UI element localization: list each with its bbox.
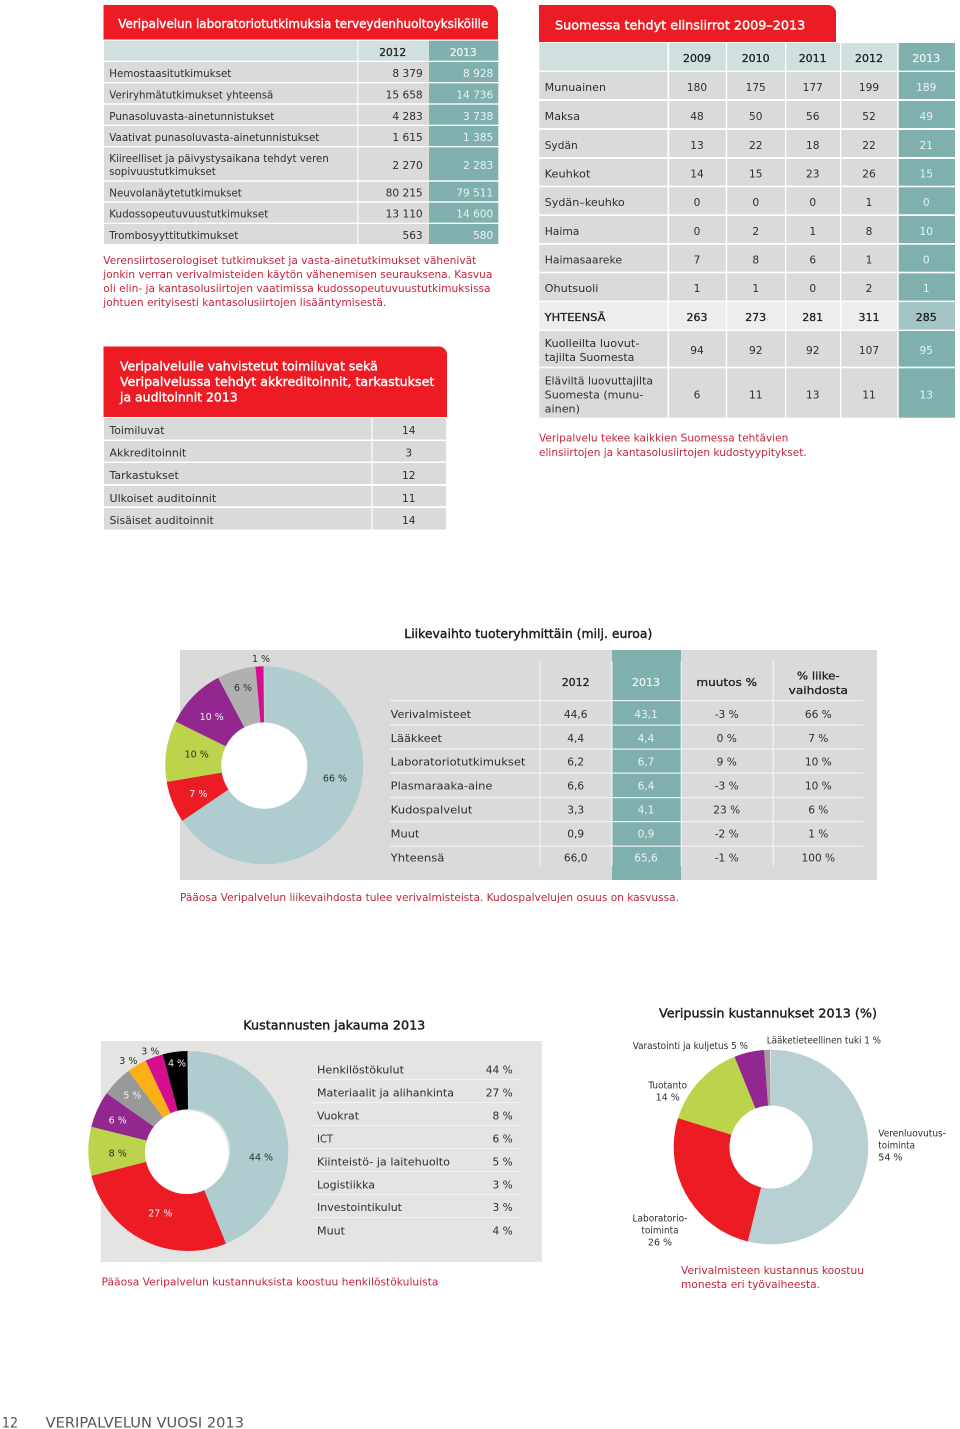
heading: cost distribution: Kustannusten jakauma 2013 <box>243 1018 425 1032</box>
chart labels: blood bag costs: 54 % <box>878 1152 902 1164</box>
row: Eläviltä luovuttajilta: 6 <box>694 389 701 401</box>
row: Maksa <box>539 101 955 128</box>
row: Materiaalit ja alihankinta: Materiaalit ja alihankinta <box>317 1086 454 1099</box>
table header row: 2013 <box>450 47 477 59</box>
row: Hemostaasitutkimukset: Hemostaasitutkimukset <box>109 67 232 80</box>
row: Ohutsuoli: 1 <box>694 283 700 295</box>
row: Haimasaareke: Haimasaareke <box>545 254 622 267</box>
row: Munuainen: Munuainen <box>545 81 606 94</box>
row: Kiireelliset ja päivystysaikana tehdyt: 2 270 <box>392 160 423 172</box>
donut chart: costs: 3 % <box>119 1056 137 1067</box>
row: YHTEENSÄ total: 263 <box>686 311 708 324</box>
row: Ohutsuoli <box>539 273 955 301</box>
row: YHTEENSÄ total: 311 <box>858 311 880 324</box>
panel: laboratory tests table <box>104 5 498 244</box>
text block: serology note: jonkin verran verivalmisteiden käytön vähenemisen seurauksena. Kasvua <box>102 268 492 281</box>
text block: serology note: johtuen erityisesti kantasolusiirtojen lisääntymisestä. <box>102 296 386 309</box>
table header row: 2012 <box>855 52 883 65</box>
table: turnover by product group <box>390 650 863 880</box>
row: Keuhkot: Keuhkot <box>545 168 591 181</box>
row: Logistiikka: Logistiikka <box>317 1178 375 1191</box>
row: Kuolleilta luovuttajilta: 92 <box>749 345 762 357</box>
chart labels: blood bag costs: Varastointi ja kuljetus 5 % <box>633 1041 748 1052</box>
row: Ulkoiset auditoinnit <box>104 486 446 506</box>
row: Maksa: Maksa <box>545 110 580 123</box>
table header row <box>104 41 498 61</box>
row: Logistiikka <box>317 1178 513 1191</box>
row: Hemostaasitutkimukset: 8 928 <box>463 68 494 80</box>
heading: licences and audits: ja auditoinnit 2013 <box>119 390 238 404</box>
row: Yhteensä <box>390 851 835 864</box>
row: Punasoluvasta-ainetunnistukset <box>104 105 498 125</box>
row: Toimiluvat <box>104 418 446 440</box>
row: Lääkkeet <box>391 732 828 745</box>
row: Sydän–keuhko: 1 <box>866 197 872 209</box>
panel: licences and audits table <box>104 346 447 530</box>
row: Haima: 2 <box>752 226 759 238</box>
row: Muut: Muut <box>317 1224 346 1237</box>
table header row: 2009 <box>683 52 711 65</box>
chart labels: blood bag costs: Lääketieteellinen tuki 1 % <box>767 1036 881 1046</box>
row: Neuvolanäytetutkimukset: Neuvolanäytetutkimukset <box>109 187 242 200</box>
row: Plasmaraaka-aine: 10 % <box>805 781 832 793</box>
row: Kiireelliset ja päivystysaikana tehdyt: sopivuustutkimukset <box>109 165 216 178</box>
table header row: 2013 <box>912 52 940 65</box>
row: Munuainen: 199 <box>859 82 879 94</box>
row: Plasmaraaka-aine <box>391 780 832 793</box>
row: Kuolleilta luovuttajilta: tajilta Suomesta <box>545 351 634 364</box>
row: Haima: Haima <box>545 225 579 238</box>
row: Kudospalvelut: 6 % <box>808 804 828 816</box>
row: Trombosyyttitutkimukset <box>104 224 498 244</box>
row: Munuainen <box>539 72 955 99</box>
row: Maksa: 48 <box>690 111 704 123</box>
chart labels: blood bag costs: 14 % <box>656 1092 680 1104</box>
row: Hemostaasitutkimukset <box>104 62 498 82</box>
row: Kuolleilta luovuttajilta <box>539 331 955 367</box>
donut chart: costs: 3 % <box>141 1047 159 1058</box>
row: Eläviltä luovuttajilta: Suomesta (munu- <box>545 388 643 401</box>
row: Keuhkot: 26 <box>862 169 876 181</box>
donut chart: costs: 4 % <box>168 1059 186 1070</box>
row: Haimasaareke: 7 <box>694 255 700 267</box>
row: Verivalmisteet <box>391 708 832 721</box>
row: Kiinteistö- ja laitehuolto <box>317 1155 513 1168</box>
row: Ohutsuoli: 1 <box>752 283 759 295</box>
row: Materiaalit ja alihankinta <box>317 1086 513 1099</box>
table header labels: muutos % <box>696 676 757 689</box>
chart labels: blood bag costs: toiminta <box>642 1226 678 1236</box>
row: Sydän: 22 <box>749 140 762 152</box>
row: Tarkastukset <box>104 463 446 484</box>
row: Kudospalvelut <box>391 803 828 816</box>
chart labels: blood bag costs: Verenluovutus- <box>878 1128 946 1140</box>
row: YHTEENSÄ total: 273 <box>745 311 766 324</box>
chart labels: blood bag costs: Tuotanto <box>647 1080 687 1092</box>
row: Verivalmisteet: Verivalmisteet <box>391 708 472 721</box>
row: Sydän–keuhko: Sydän–keuhko <box>545 196 625 209</box>
row: Sydän <box>539 130 955 157</box>
row: Sydän–keuhko: 0 <box>694 197 701 209</box>
row: Munuainen: 180 <box>687 82 707 94</box>
text block: tissue typing note: elinsiirtojen ja kantasolusiirtojen kudostyypitykset. <box>539 446 807 459</box>
table header labels: % liike- <box>797 670 840 682</box>
row: Sydän–keuhko: 0 <box>923 197 930 209</box>
donut chart: costs: 44 % <box>249 1153 273 1164</box>
row: Haimasaareke: 0 <box>923 255 930 267</box>
row: Vuokrat: Vuokrat <box>317 1109 360 1122</box>
donut chart: costs: 6 % <box>109 1115 127 1126</box>
row: Ulkoiset auditoinnit: Ulkoiset auditoinnit <box>110 492 217 505</box>
row: Yhteensä: -1 % <box>715 852 739 864</box>
row: Eläviltä luovuttajilta: 13 <box>920 389 933 401</box>
row: Laboratoriotutkimukset: 10 % <box>805 756 832 768</box>
heading: licences and audits <box>104 346 447 417</box>
heading: organ transplants <box>539 5 836 42</box>
heading: organ transplants: Suomessa tehdyt elinsiirrot 2009–2013 <box>555 18 805 32</box>
row: Eläviltä luovuttajilta: 11 <box>862 389 876 401</box>
row: Vaativat punasoluvasta-ainetunnistukset: Vaativat punasoluvasta-ainetunnistukset <box>109 131 320 144</box>
row: YHTEENSÄ total: 285 <box>916 311 937 324</box>
heading: laboratory tests: Veripalvelun laboratoriotutkimuksia terveydenhuoltoyksiköille <box>118 16 489 31</box>
donut chart: turnover: 7 % <box>189 789 207 800</box>
row: Eläviltä luovuttajilta: 13 <box>806 389 819 401</box>
row: ICT: 6 % <box>493 1133 513 1145</box>
row: Ohutsuoli: Ohutsuoli <box>545 282 598 295</box>
row: Maksa: 49 <box>920 111 933 123</box>
row: Lääkkeet: 4,4 <box>638 733 655 745</box>
row: Keuhkot: 23 <box>806 169 819 181</box>
row: Laboratoriotutkimukset: Laboratoriotutkimukset <box>391 755 526 768</box>
table header labels: vaihdosta <box>789 684 848 697</box>
donut chart: costs: 8 % <box>109 1149 127 1160</box>
row: Kudospalvelut: 23 % <box>713 804 740 816</box>
row: Verivalmisteet: 44,6 <box>564 709 588 721</box>
row: Kuolleilta luovuttajilta: 95 <box>920 345 933 357</box>
row: Trombosyyttitutkimukset: 580 <box>473 230 494 242</box>
text block: tissue typing note: Veripalvelu tekee kaikkien Suomessa tehtävien <box>539 432 788 445</box>
row: Investointikulut <box>317 1201 513 1214</box>
row: Muut <box>317 1224 513 1237</box>
row: Neuvolanäytetutkimukset: 80 215 <box>386 188 423 200</box>
row: Laboratoriotutkimukset <box>391 755 832 768</box>
row: Lääkkeet: 0 % <box>717 733 737 745</box>
row: Verivalmisteet: -3 % <box>715 709 739 721</box>
row: Eläviltä luovuttajilta: 11 <box>749 389 762 401</box>
text block: blood bag note: monesta eri työvaiheesta. <box>681 1278 820 1291</box>
row: Laboratoriotutkimukset: 9 % <box>717 756 737 768</box>
row: Vaativat punasoluvasta-ainetunnistukset <box>104 126 498 146</box>
row: Trombosyyttitutkimukset: Trombosyyttitutkimukset <box>108 229 239 242</box>
row: Lääkkeet: Lääkkeet <box>391 732 443 745</box>
panel: turnover chart and table <box>180 650 877 880</box>
heading: blood bag costs: Veripussin kustannukset 2013 (%) <box>659 1006 877 1020</box>
row: Vaativat punasoluvasta-ainetunnistukset: 1 615 <box>392 132 423 144</box>
row: Sydän–keuhko <box>539 187 955 214</box>
donut chart: turnover: 6 % <box>234 683 252 694</box>
row: Sydän: 18 <box>806 140 820 152</box>
row: Neuvolanäytetutkimukset: 79 511 <box>456 188 493 200</box>
row: Keuhkot <box>539 159 955 186</box>
row: Haima: 8 <box>866 226 873 238</box>
text block: serology note: Verensiirtoserologiset tutkimukset ja vasta-ainetutkimukset vähenivät <box>103 254 477 267</box>
row: Kudossopeutuvuustutkimukset: 13 110 <box>386 209 423 221</box>
table header labels: 2013 <box>632 676 660 689</box>
row: Plasmaraaka-aine: Plasmaraaka-aine <box>391 780 493 793</box>
row: Ulkoiset auditoinnit: 11 <box>402 493 415 505</box>
row: Kuolleilta luovuttajilta: 92 <box>806 345 819 357</box>
donut chart: turnover: 10 % <box>200 712 224 723</box>
row: Munuainen: 189 <box>916 82 936 94</box>
row: Yhteensä: Yhteensä <box>390 851 444 864</box>
donut chart: costs <box>109 1047 273 1222</box>
row: ICT: ICT <box>317 1132 333 1145</box>
row: Veriryhmätutkimukset yhteensä: Veriryhmätutkimukset yhteensä <box>109 89 273 102</box>
chart labels: blood bag costs: Laboratorio- <box>632 1214 688 1224</box>
row: Lääkkeet: 4,4 <box>567 733 584 745</box>
heading: licences and audits: Veripalvelussa tehdyt akkreditoinnit, tarkastukset <box>120 374 434 389</box>
row: Punasoluvasta-ainetunnistukset: 4 283 <box>392 111 423 123</box>
row: Verivalmisteet: 43,1 <box>634 709 658 721</box>
row: Ohutsuoli: 1 <box>923 283 930 295</box>
row: Kudospalvelut: 4,1 <box>638 804 654 816</box>
row: Akkreditoinnit <box>104 441 446 462</box>
row: Eläviltä luovuttajilta: ainen) <box>545 402 580 415</box>
row: Akkreditoinnit: Akkreditoinnit <box>110 446 187 460</box>
row: Plasmaraaka-aine: 6,6 <box>567 781 584 793</box>
row: Neuvolanäytetutkimukset <box>104 182 498 201</box>
row: Henkilöstökulut <box>317 1063 513 1076</box>
row: ICT <box>317 1132 513 1145</box>
text block: turnover note: Pääosa Veripalvelun liikevaihdosta tulee verivalmisteista. Kudospalvelujen osuus on kasvussa. <box>180 891 679 904</box>
row: Kuolleilta luovuttajilta: 94 <box>690 345 704 357</box>
row: Muut <box>391 827 828 840</box>
heading: turnover by product group: Liikevaihto tuoteryhmittäin (milj. euroa) <box>404 626 652 641</box>
row: Tarkastukset: Tarkastukset <box>108 469 179 482</box>
row: Hemostaasitutkimukset: 8 379 <box>392 68 423 80</box>
row: Muut: 0,9 <box>567 828 584 840</box>
row: Sydän–keuhko: 0 <box>809 197 816 209</box>
row: Kudospalvelut: Kudospalvelut <box>391 803 473 816</box>
row: Haima <box>539 216 955 243</box>
chart labels: blood bag costs: 26 % <box>648 1238 672 1248</box>
row: Maksa: 50 <box>749 111 763 123</box>
donut chart: costs: 5 % <box>123 1091 141 1102</box>
chart labels: blood bag costs: toiminta <box>878 1140 915 1152</box>
row: Yhteensä: 65,6 <box>634 852 658 864</box>
table header labels: 2012 <box>562 676 590 689</box>
row: Kiireelliset ja päivystysaikana tehdyt <box>104 147 498 180</box>
row: Kiinteistö- ja laitehuolto: 5 % <box>493 1156 513 1168</box>
row: Veriryhmätutkimukset yhteensä <box>104 83 498 103</box>
row: Trombosyyttitutkimukset: 563 <box>402 230 423 242</box>
row: Laboratoriotutkimukset: 6,2 <box>567 756 584 768</box>
row: Tarkastukset: 12 <box>402 470 415 482</box>
row: Veriryhmätutkimukset yhteensä: 15 658 <box>386 90 423 102</box>
row: Maksa: 52 <box>862 111 876 123</box>
text block: tissue typing note <box>539 432 807 459</box>
table header row: 2010 <box>742 52 770 65</box>
row: Keuhkot: 15 <box>749 169 762 181</box>
chart labels: blood bag costs <box>632 1036 946 1248</box>
row: Henkilöstökulut: Henkilöstökulut <box>317 1063 405 1076</box>
table header labels <box>562 670 848 697</box>
row: Plasmaraaka-aine: 6,4 <box>638 781 655 793</box>
row: Muut: Muut <box>391 827 420 840</box>
row: Haima: 10 <box>920 226 933 238</box>
row: Yhteensä: 66,0 <box>564 852 588 864</box>
row: YHTEENSÄ total: 281 <box>802 311 823 324</box>
row: YHTEENSÄ total: YHTEENSÄ <box>544 311 606 324</box>
row: Haima: 0 <box>694 226 701 238</box>
row: Sisäiset auditoinnit: Sisäiset auditoinnit <box>110 514 214 527</box>
row: Sydän–keuhko: 0 <box>752 197 759 209</box>
text block: serology note <box>102 254 492 309</box>
row: Kudossopeutuvuustutkimukset: Kudossopeutuvuustutkimukset <box>109 208 269 221</box>
row: Kiinteistö- ja laitehuolto: Kiinteistö- ja laitehuolto <box>317 1155 450 1168</box>
text block: cost note: Pääosa Veripalvelun kustannuksista koostuu henkilöstökuluista <box>102 1276 438 1288</box>
row: Maksa: 56 <box>806 111 820 123</box>
row: Muut: 1 % <box>808 828 828 840</box>
row: Vaativat punasoluvasta-ainetunnistukset: 1 385 <box>463 132 493 144</box>
row: Kudossopeutuvuustutkimukset: 14 600 <box>456 209 494 221</box>
row: Munuainen: 177 <box>803 82 823 94</box>
row: Eläviltä luovuttajilta <box>539 368 955 418</box>
row: Sisäiset auditoinnit: 14 <box>402 515 416 527</box>
donut chart: turnover: 10 % <box>185 750 209 761</box>
panel: cost distribution chart and table <box>101 1041 542 1262</box>
row: Verivalmisteet: 66 % <box>805 709 832 721</box>
donut chart: turnover: 66 % <box>323 773 347 784</box>
row: Haima: 1 <box>809 226 816 238</box>
text block: blood bag note: Verivalmisteen kustannus koostuu <box>681 1264 864 1277</box>
row: Henkilöstökulut: 44 % <box>486 1064 513 1076</box>
heading: licences and audits: Veripalvelulle vahvistetut toimiluvat sekä <box>120 358 378 374</box>
row: Toimiluvat: 14 <box>402 425 416 437</box>
row: Kudossopeutuvuustutkimukset <box>104 203 498 223</box>
row: Vuokrat <box>317 1109 513 1122</box>
donut chart: turnover: 1 % <box>252 654 270 665</box>
row: Toimiluvat: Toimiluvat <box>109 424 165 437</box>
table header row: 2011 <box>799 52 827 65</box>
row: Munuainen: 175 <box>746 82 766 94</box>
row: Lääkkeet: 7 % <box>808 733 828 745</box>
row: Eläviltä luovuttajilta: Eläviltä luovuttajilta <box>545 374 653 387</box>
row: Vuokrat: 8 % <box>493 1110 513 1122</box>
donut chart: blood bag costs <box>702 1078 840 1216</box>
row: Ohutsuoli: 2 <box>866 283 872 295</box>
row: Punasoluvasta-ainetunnistukset: Punasoluvasta-ainetunnistukset <box>109 110 275 123</box>
row: Veriryhmätutkimukset yhteensä: 14 736 <box>456 90 494 102</box>
row: Keuhkot: 14 <box>690 169 704 181</box>
row: Haimasaareke <box>539 245 955 272</box>
text block: serology note: oli elin- ja kantasolusiirtojen vaatimissa kudossopeutuvuustutkimuksissa <box>103 282 491 295</box>
row: Kudospalvelut: 3,3 <box>567 804 584 816</box>
table header row <box>539 43 955 71</box>
row: Haimasaareke: 8 <box>752 255 759 267</box>
row: Investointikulut: Investointikulut <box>317 1201 403 1214</box>
row: Keuhkot: 15 <box>920 169 933 181</box>
row: Yhteensä: 100 % <box>801 852 835 864</box>
row: Kuolleilta luovuttajilta: 107 <box>859 345 879 357</box>
row: Sisäiset auditoinnit <box>104 508 446 530</box>
row: Ohutsuoli: 0 <box>809 283 816 295</box>
row: Sydän: 21 <box>920 140 933 152</box>
row: Akkreditoinnit: 3 <box>405 448 412 460</box>
row: Plasmaraaka-aine: -3 % <box>715 781 739 793</box>
row: Kiireelliset ja päivystysaikana tehdyt: 2 283 <box>463 160 493 172</box>
row: Muut: -2 % <box>715 828 739 840</box>
row: Muut: 0,9 <box>638 828 654 840</box>
row: Sydän: 22 <box>862 140 876 152</box>
row: Muut: 4 % <box>493 1225 513 1237</box>
row: Kuolleilta luovuttajilta: Kuolleilta luovut- <box>545 337 639 350</box>
donut chart: turnover <box>185 654 347 836</box>
row: Punasoluvasta-ainetunnistukset: 3 738 <box>463 111 494 123</box>
row: Kiireelliset ja päivystysaikana tehdyt: Kiireelliset ja päivystysaikana tehdyt veren <box>109 152 329 165</box>
heading: laboratory tests <box>104 5 498 40</box>
row: Sydän: 13 <box>690 140 704 152</box>
panel: organ transplants table <box>539 5 955 418</box>
row: Haimasaareke: 6 <box>809 255 816 267</box>
text block: blood bag note <box>681 1264 864 1291</box>
row: Logistiikka: 3 % <box>493 1179 513 1191</box>
row: Investointikulut: 3 % <box>493 1202 513 1214</box>
row: YHTEENSÄ total <box>539 302 955 330</box>
row: Materiaalit ja alihankinta: 27 % <box>486 1087 513 1099</box>
row: Laboratoriotutkimukset: 6,7 <box>638 756 654 768</box>
table header row: 2012 <box>379 47 406 59</box>
row: Sydän: Sydän <box>545 139 578 152</box>
table: costs <box>312 1063 520 1237</box>
row: Haimasaareke: 1 <box>866 255 872 267</box>
donut chart: costs: 27 % <box>148 1209 172 1220</box>
